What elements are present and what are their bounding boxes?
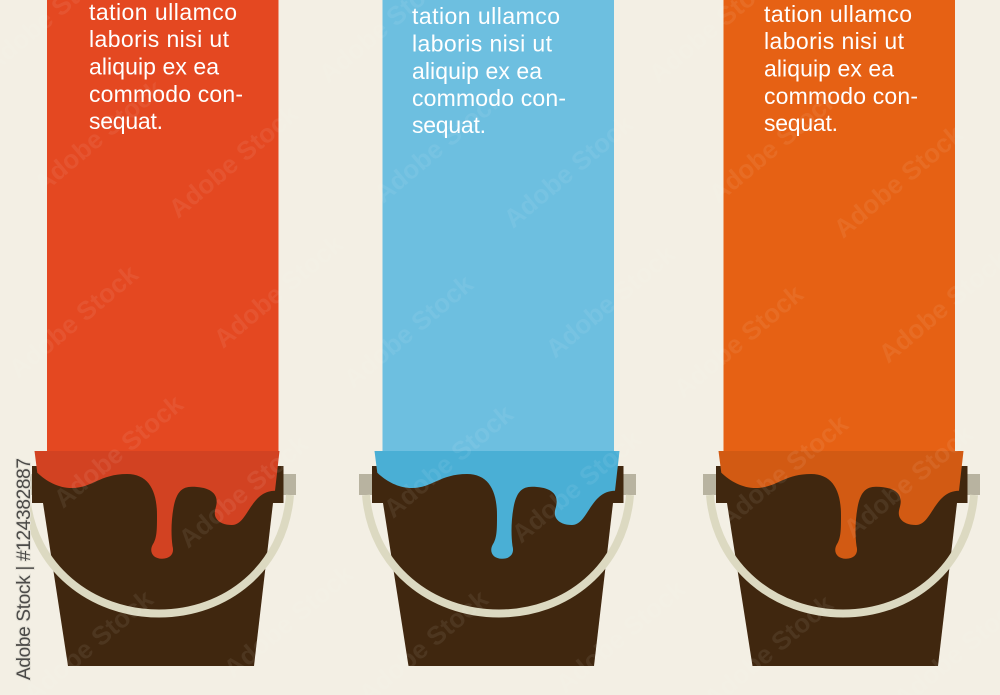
watermark pattern: Adobe Stock	[713, 408, 854, 534]
watermark pattern: Adobe Stock	[48, 388, 189, 514]
text block: red column: laboris nisi ut	[89, 26, 230, 52]
text block: orange column	[764, 1, 918, 136]
text block: blue column	[412, 3, 566, 138]
text block: red column: aliquip ex ea	[89, 54, 219, 80]
text block: orange column: aliquip ex ea	[764, 56, 894, 82]
watermark pattern: Adobe Stock	[163, 98, 304, 224]
watermark pattern: Adobe Stock	[208, 228, 349, 354]
text block: orange column: tation ullamco	[764, 1, 912, 27]
watermark pattern: Adobe Stock	[218, 558, 359, 684]
watermark pattern: Adobe Stock	[368, 83, 509, 209]
watermark id label: Adobe Stock | #124382887	[14, 458, 35, 680]
icon: orange paint bucket	[703, 451, 980, 666]
text block: orange column: commodo con-	[764, 83, 918, 109]
watermark pattern: Adobe Stock	[378, 398, 519, 524]
watermark pattern: Adobe Stock	[28, 73, 169, 199]
panel: red paint column	[47, 0, 278, 452]
watermark pattern: Adobe Stock	[3, 258, 144, 384]
watermark pattern: Adobe Stock	[338, 268, 479, 394]
text block: blue column: sequat.	[412, 112, 486, 138]
text block: blue column: aliquip ex ea	[412, 58, 542, 84]
panel: orange paint column	[724, 0, 955, 452]
watermark pattern: Adobe Stock	[540, 238, 681, 364]
text block: orange column: sequat.	[764, 110, 838, 136]
text block: orange column: laboris nisi ut	[764, 28, 905, 54]
panel: blue paint column	[382, 0, 614, 452]
text block: red column	[89, 0, 243, 134]
watermark pattern: Adobe Stock	[703, 83, 844, 209]
watermark pattern: Adobe Stock	[173, 428, 314, 554]
watermark id label: Adobe Stock | #124382887	[14, 458, 35, 680]
watermark pattern: Adobe Stock	[550, 573, 691, 695]
text block: red column: sequat.	[89, 108, 163, 134]
watermark pattern: Adobe Stock	[828, 118, 969, 244]
text block: red column: commodo con-	[89, 81, 243, 107]
text block: blue column: laboris nisi ut	[412, 30, 553, 56]
watermark pattern: Adobe Stock	[668, 278, 809, 404]
watermark pattern: Adobe Stock	[838, 418, 979, 544]
watermark pattern: Adobe Stock	[506, 423, 647, 549]
icon: blue paint bucket	[359, 451, 636, 666]
text block: blue column: commodo con-	[412, 85, 566, 111]
icon: red paint bucket	[26, 451, 296, 666]
text block: blue column: tation ullamco	[412, 3, 560, 29]
watermark pattern: Adobe Stock	[498, 108, 639, 234]
